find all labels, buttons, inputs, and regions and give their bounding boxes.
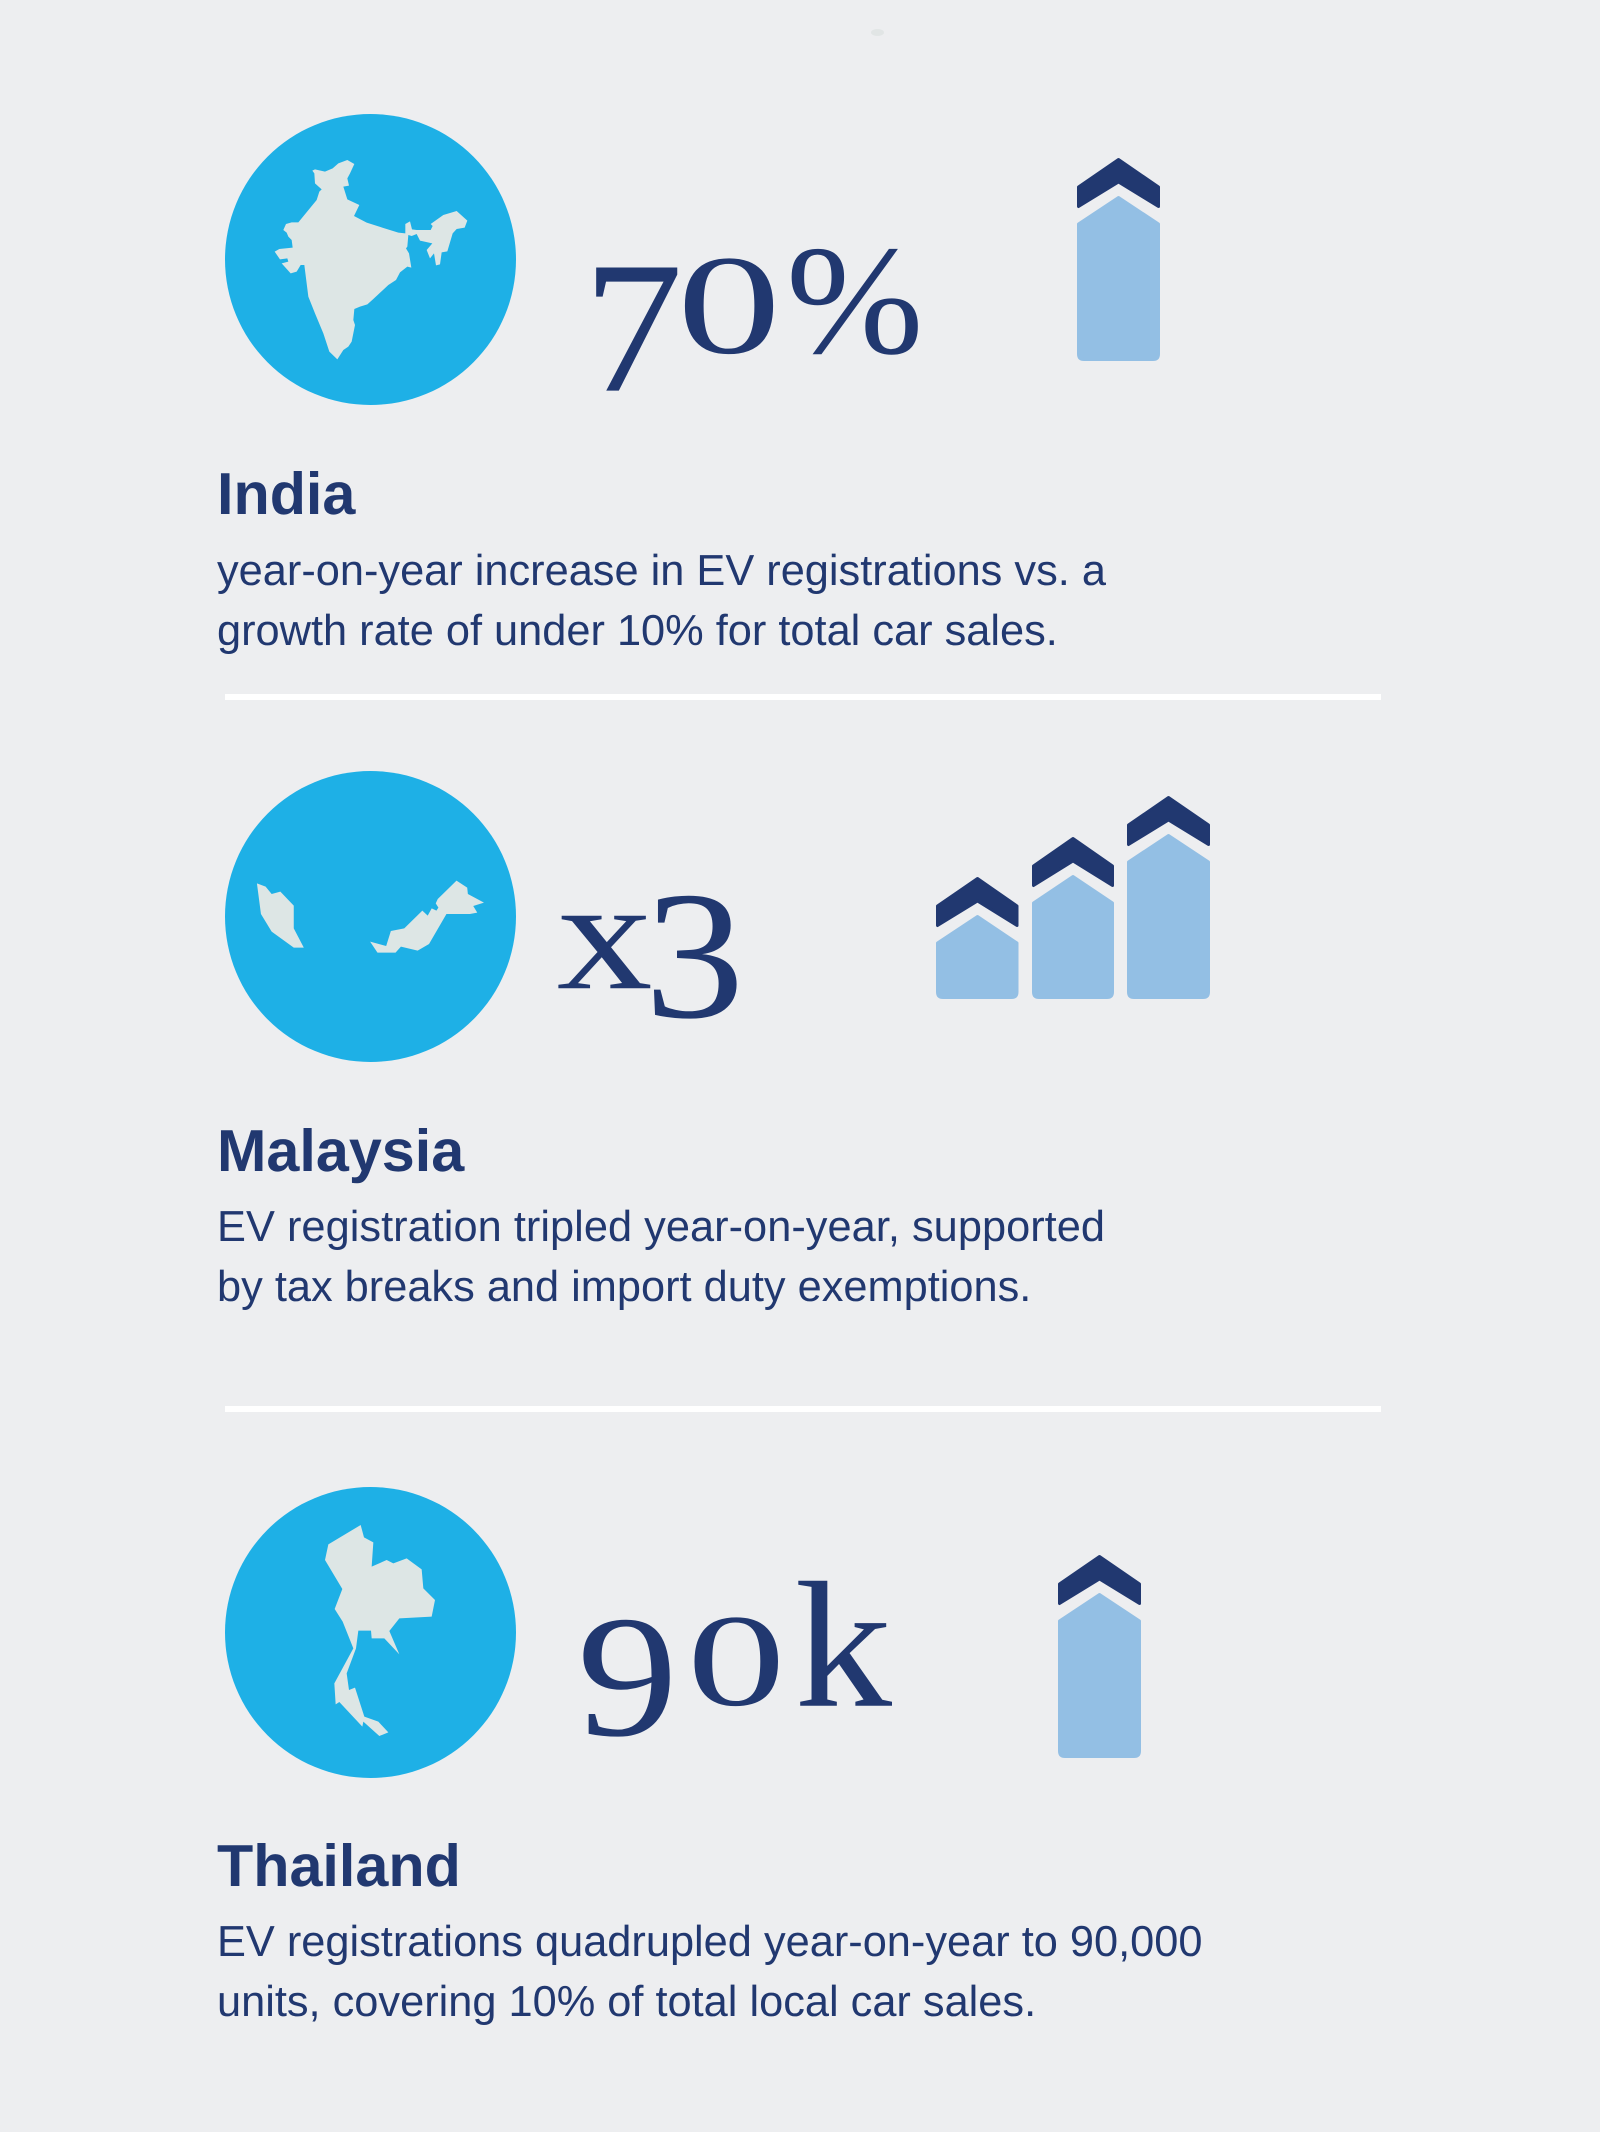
big number: 70%: 0 [677, 226, 781, 384]
text: India description [217, 547, 1107, 655]
text: Thailand description: EV registrations quadrupled year-on-year to 90,000 [217, 1918, 1202, 1966]
panel: Malaysia [217, 771, 1210, 1311]
icon: Malaysia map in blue circle [225, 771, 516, 1062]
text: Malaysia description [217, 1203, 1105, 1311]
big number: 70% [583, 214, 923, 432]
icon: Thailand map in blue circle [225, 1487, 516, 1778]
small faint mark at top [871, 29, 884, 36]
big number: x3 [557, 848, 744, 1057]
big number: 90k: k [795, 1546, 892, 1745]
heading: India: India [217, 460, 356, 527]
big number: 70%: 7 [583, 223, 683, 432]
heading: Malaysia: Malaysia [217, 1117, 465, 1184]
heading: Thailand: Thailand [217, 1832, 461, 1899]
big number: 70%: % [786, 214, 923, 387]
panel: India [217, 114, 1160, 655]
text: Malaysia description: by tax breaks and import duty exemptions. [217, 1263, 1031, 1311]
divider [225, 694, 1381, 700]
icon: three rising arrows [938, 798, 1208, 998]
text: India description: year-on-year increase in EV registrations vs. a [217, 547, 1107, 595]
big number: 90k: 0 [687, 1588, 786, 1734]
panel: Thailand [217, 1487, 1202, 2026]
big number: x3: x [557, 848, 653, 1023]
icon: single rising arrow [1078, 160, 1158, 360]
text: Thailand description: units, covering 10% of total local car sales. [217, 1978, 1036, 2026]
icon: India map in blue circle [225, 114, 516, 405]
text: Thailand description [217, 1918, 1202, 2026]
big number: x3: 3 [644, 854, 744, 1057]
divider [225, 1406, 1381, 1412]
big number: 90k [577, 1546, 892, 1773]
icon: single rising arrow [1060, 1556, 1140, 1756]
text: India description: growth rate of under 10% for total car sales. [217, 607, 1058, 655]
big number: 90k: 9 [577, 1580, 678, 1773]
text: Malaysia description: EV registration tripled year-on-year, supported [217, 1203, 1105, 1251]
